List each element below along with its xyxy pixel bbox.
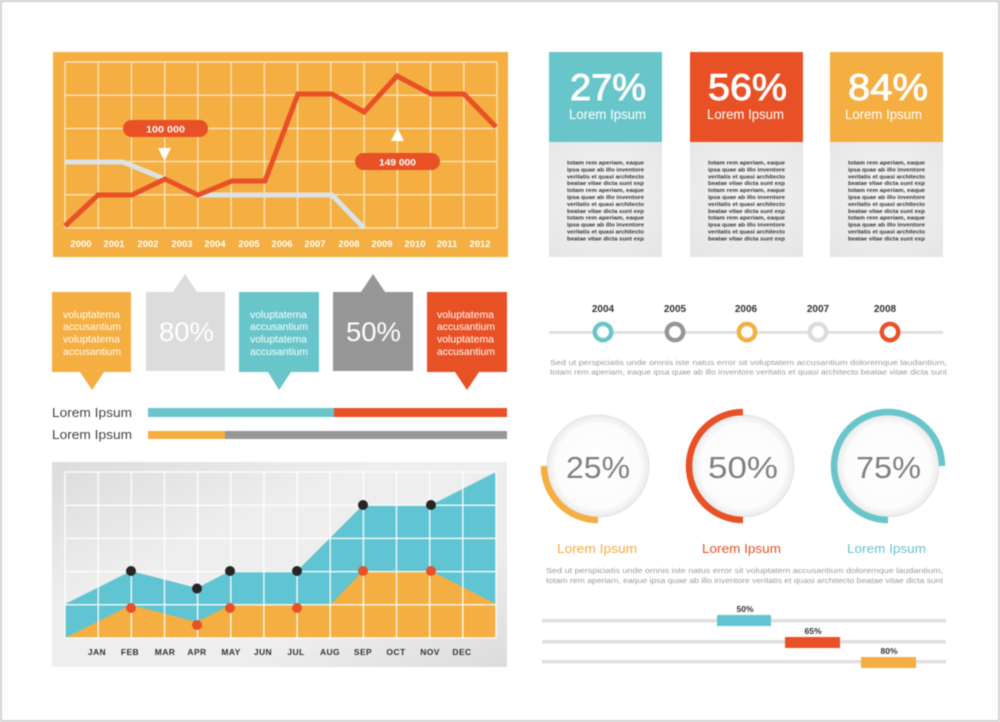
month axis labels: APR [187,647,207,657]
month axis labels: JAN [88,647,106,657]
year axis labels: 2011 [437,239,458,250]
year labels: 2008 [874,304,897,315]
card body text: ipsa quae ab illo inventore [848,167,926,173]
card body text: ipsa quae ab illo inventore [708,223,786,229]
month axis labels: OCT [386,647,406,657]
callout: teal text box: voluptatema [250,309,307,321]
callout: 100 000: 100 000 [146,124,185,136]
panel: stat card 84% [830,52,943,257]
year axis labels [70,239,491,250]
text block: gauge description: totam rem aperiam, eaque ipsa quae ab illo inventore veritatis et quasi architecto beatae vitae dicta sunt [546,578,943,585]
text block: timeline description: totam rem aperiam, eaque ipsa quae ab illo inventore veritatis et quasi architecto beatae vitae dicta sunt [550,370,947,376]
card body text: veritatis et quasi architecto [708,174,785,180]
panel: stat card 84%: Lorem Ipsum [845,107,922,122]
teal area [65,472,496,638]
gauge: 75% [834,412,942,556]
year axis labels: 2012 [469,239,491,250]
panel: stat card 56%: 56% [708,67,787,108]
card body text: veritatis et quasi architecto [567,230,644,236]
card body text: veritatis et quasi architecto [567,174,644,180]
year axis labels: 2001 [103,239,125,250]
slider: 50%: 50% [736,604,754,614]
year axis labels: 2002 [137,239,159,250]
card body text: veritatis et quasi architecto [708,230,785,236]
panel: stat card 27%: Lorem Ipsum [569,107,646,122]
year axis labels: 2010 [404,239,426,250]
pale data line [65,162,364,228]
card body text: totam rem aperiam, eaque [848,160,926,166]
card body text: veritatis et quasi architecto [567,202,644,208]
month axis labels: SEP [354,647,372,657]
card body text: veritatis et quasi architecto [708,202,785,208]
card body text: ipsa quae ab illo inventore [567,195,645,201]
year axis labels: 2000 [70,239,92,250]
callout: 100 000 [123,120,208,161]
callout: red text box [427,292,507,390]
card body text: beatae vitae dicta sunt exp [567,209,644,215]
gauge: 75%: 75% [856,450,921,485]
callout: red text box: voluptatema [437,334,494,346]
month axis labels: MAR [155,647,175,657]
timeline [549,304,943,340]
year axis labels: 2006 [271,239,293,250]
callout: orange text box: voluptatema [63,334,120,346]
timeline rings [595,324,898,340]
gauge: 50%: 50% [708,450,778,485]
progress bar: orange and gray [52,427,507,442]
card body text: ipsa quae ab illo inventore [567,167,645,173]
text block: timeline description [550,360,947,376]
card body text: veritatis et quasi architecto [848,174,925,180]
card body text: ipsa quae ab illo inventore [708,195,786,201]
callout: 149 000: 149 000 [379,158,416,168]
orange area [65,571,496,638]
panel: stat card 27% [549,52,662,257]
card body text: beatae vitae dicta sunt exp [848,209,925,215]
callout: 149 000 [355,128,440,170]
red markers [126,566,436,630]
year axis labels: 2009 [371,239,393,250]
panel: monthly area chart [52,462,507,667]
panel: stat card 56%: Lorem Ipsum [707,107,784,122]
gauge: 75%: Lorem Ipsum [847,541,926,556]
panel: stat card 56% [690,52,803,257]
card body text: totam rem aperiam, eaque [708,216,786,222]
card body text: veritatis et quasi architecto [848,230,925,236]
card body text: totam rem aperiam, eaque [848,216,926,222]
gauge: 25% [544,414,650,556]
callout: teal text box: accusantium [250,321,308,333]
panel: stat card 27%: 27% [570,67,646,108]
slider: 65%: 65% [804,626,822,636]
callout: teal text box [239,292,319,390]
callout: red text box: voluptatema [437,309,494,321]
year axis labels: 2004 [204,239,226,250]
panel: stat card 84%: 84% [848,67,928,108]
card body text: beatae vitae dicta sunt exp [567,236,644,242]
callout: teal text box: voluptatema [250,334,307,346]
card body text: beatae vitae dicta sunt exp [567,181,644,187]
gauge: 25%: Lorem Ipsum [557,541,637,556]
text block: gauge description [546,568,943,585]
card body text: totam rem aperiam, eaque [567,216,645,222]
card body text: totam rem aperiam, eaque [567,188,645,194]
month axis labels: JUL [287,647,305,657]
month axis labels: MAY [221,647,241,657]
year labels: 2007 [807,304,830,315]
card body text: beatae vitae dicta sunt exp [708,209,785,215]
card body text: beatae vitae dicta sunt exp [708,181,785,187]
slider: 80% [542,646,946,668]
card body text: ipsa quae ab illo inventore [848,223,926,229]
text block: gauge description: Sed ut perspiciatis unde omnis iste natus error sit voluptatem accusantium doloremque laudantium, [546,568,943,575]
year labels: 2005 [664,304,687,315]
callout: orange text box [52,292,131,390]
card body text: totam rem aperiam, eaque [567,160,645,166]
month axis labels: AUG [320,647,340,657]
slider: 80%: 80% [880,646,898,656]
year labels [592,304,897,315]
card body text [708,160,786,242]
year labels: 2004 [592,304,615,315]
month axis labels: DEC [452,647,472,657]
red data line [65,76,496,226]
year axis labels: 2007 [304,239,326,250]
callout: dark gray 50%: 50% [346,317,401,347]
card body text [848,160,926,242]
month axis labels: NOV [420,647,440,657]
card body text: ipsa quae ab illo inventore [708,167,786,173]
year labels: 2006 [735,304,758,315]
card body text: beatae vitae dicta sunt exp [708,236,785,242]
black markers [126,500,436,594]
card body text: totam rem aperiam, eaque [708,188,786,194]
callout: light gray 80% [146,274,225,371]
card body text: ipsa quae ab illo inventore [848,195,926,201]
panel: yearly line chart [53,52,508,257]
card body text: veritatis et quasi architecto [848,202,925,208]
callout: teal text box: accusantium [250,346,308,358]
callout: orange text box: voluptatema [63,309,120,321]
card body text: totam rem aperiam, eaque [708,160,786,166]
card body text: beatae vitae dicta sunt exp [848,181,925,187]
callout: orange text box: accusantium [63,346,121,358]
card body text: totam rem aperiam, eaque [848,188,926,194]
progress bar: teal and red: Lorem Ipsum [52,405,132,420]
card body text: ipsa quae ab illo inventore [567,223,645,229]
year axis labels: 2005 [238,239,260,250]
callout: dark gray 50% [333,274,413,371]
month axis labels: JUN [254,647,272,657]
slider: 65% [542,626,946,648]
slider: 50% [542,604,946,626]
year axis labels: 2003 [171,239,193,250]
gauge: 25%: 25% [566,450,630,485]
gauge: 50% [689,412,794,556]
progress bar: teal and red [52,405,507,420]
text block: timeline description: Sed ut perspiciatis unde omnis iste natus error sit voluptatem accusantium doloremque laudantium, [550,360,947,367]
callout: red text box: accusantium [437,321,495,333]
year axis labels: 2008 [338,239,360,250]
callout: orange text box: accusantium [63,321,121,333]
month axis labels: FEB [121,647,139,657]
gauge: 50%: Lorem Ipsum [702,541,781,556]
card body text [567,160,645,242]
card body text: beatae vitae dicta sunt exp [848,236,925,242]
callout: light gray 80%: 80% [159,317,214,347]
callout: red text box: accusantium [437,346,495,358]
month axis labels [88,647,472,657]
progress bar: orange and gray: Lorem Ipsum [52,427,132,442]
